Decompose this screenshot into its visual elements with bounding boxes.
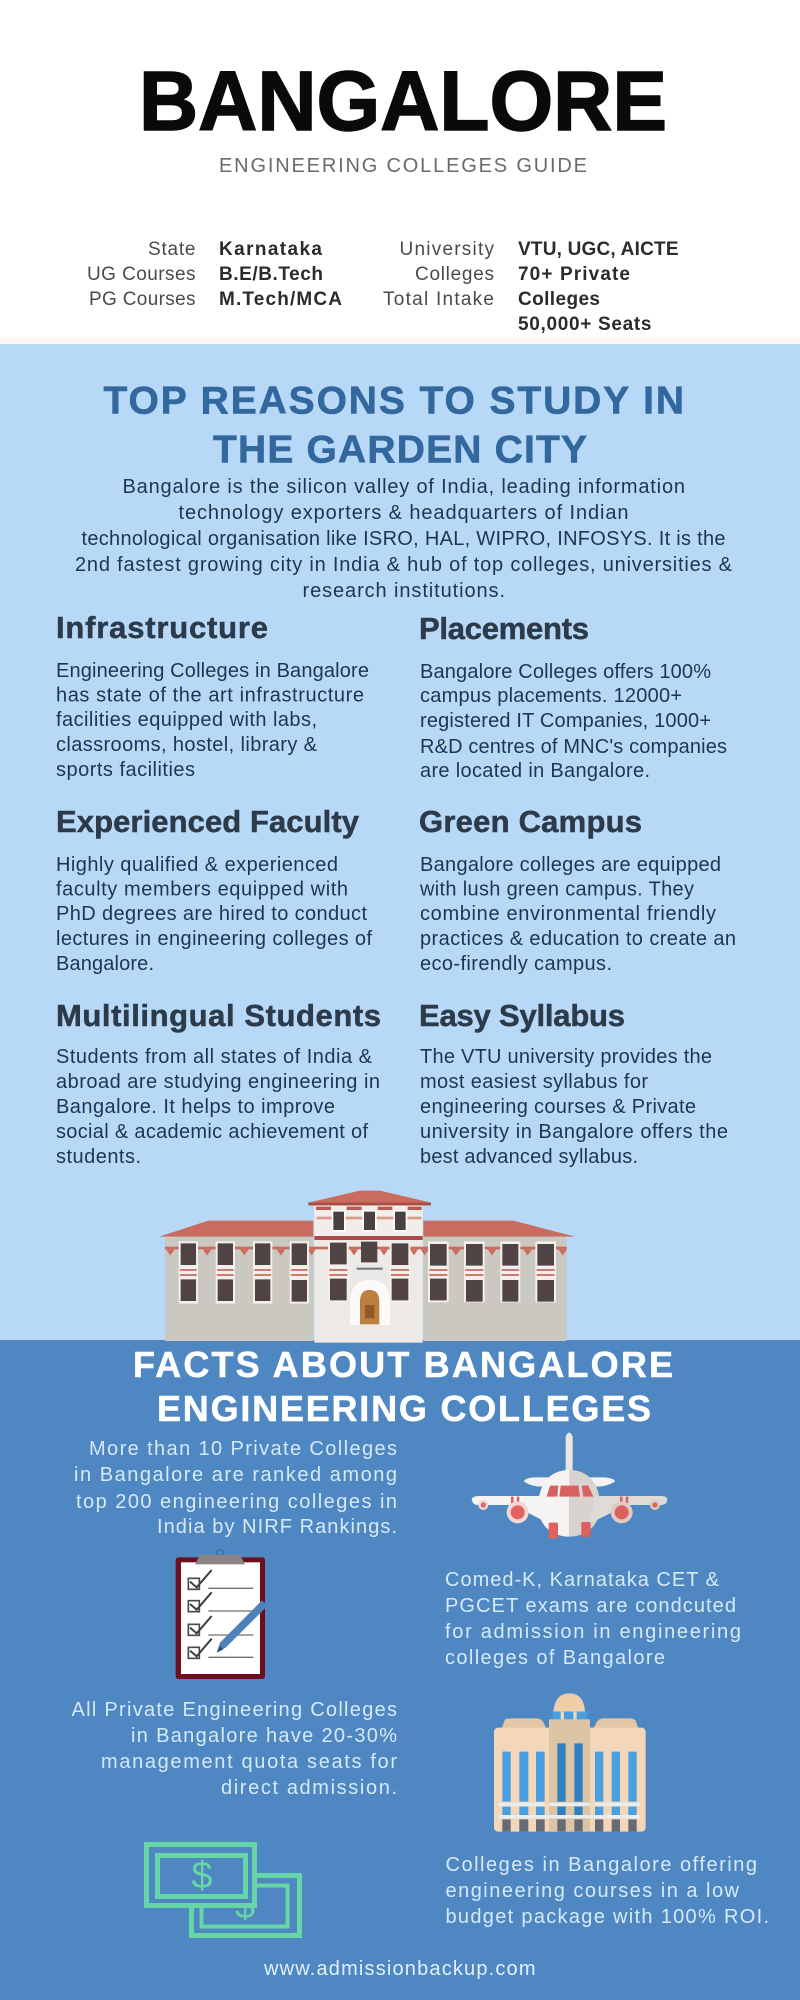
key facts table: right column: University: [400, 239, 494, 260]
intro paragraph: research institutions.: [302, 580, 505, 602]
reason: infrastructure: has state of the art infrastructure: [56, 684, 364, 706]
reason: multilingual students: social & academic achievement of: [56, 1121, 368, 1143]
icon: office building: [494, 1693, 646, 1832]
key facts table: left column: State: [148, 239, 196, 260]
key facts table: left column: PG Courses: [89, 289, 196, 310]
reason: infrastructure: Infrastructure: [56, 610, 268, 645]
fact: low budget: budget package with 100% ROI.: [446, 1906, 769, 1928]
intro paragraph: technological organisation like ISRO, HAL, WIPRO, INFOSYS. It is the: [82, 528, 726, 550]
key facts table: right column: Colleges: [518, 289, 600, 310]
key facts table: right column: 50,000+ Seats: [518, 314, 652, 335]
icon: banknotes: $: [235, 1885, 255, 1926]
icon: clipboard checklist: [176, 1550, 268, 1679]
reason: green campus: eco-firendly campus.: [420, 953, 612, 975]
footer website: www.admissionbackup.com: [263, 1958, 536, 1980]
subtitle: ENGINEERING COLLEGES GUIDE: [219, 155, 587, 177]
reason: placements: campus placements. 12000+: [420, 685, 682, 707]
fact: entrance exams: PGCET exams are condcuted: [445, 1595, 736, 1617]
reason: placements: registered IT Companies, 1000+: [420, 710, 711, 732]
heading: top reasons: [104, 380, 684, 472]
reason: multilingual students: abroad are studying engineering in: [56, 1071, 380, 1093]
fact: NIRF rankings: in Bangalore are ranked among: [74, 1464, 397, 1486]
intro paragraph: 2nd fastest growing city in India & hub of top colleges, universities &: [75, 554, 733, 576]
reason: experienced faculty: Experienced Faculty: [56, 804, 360, 839]
fact: entrance exams: [445, 1569, 741, 1669]
fact: management quota: management quota seats for: [101, 1751, 397, 1773]
reason: easy syllabus: best advanced syllabus.: [420, 1146, 638, 1168]
fact: management quota: in Bangalore have 20-30%: [131, 1725, 397, 1747]
reason: placements: Placements: [419, 611, 589, 646]
icon: banknotes: $: [191, 1855, 213, 1897]
reason: easy syllabus: [419, 998, 728, 1168]
panel: header: [0, 0, 800, 344]
fact: entrance exams: Comed-K, Karnataka CET &: [445, 1569, 720, 1591]
reason: placements: Bangalore Colleges offers 100%: [420, 661, 711, 683]
fact: NIRF rankings: [74, 1438, 397, 1538]
reason: easy syllabus: engineering courses & Private: [420, 1096, 696, 1118]
reason: placements: R&D centres of MNC's companies: [420, 736, 727, 758]
reason: multilingual students: Multilingual Students: [56, 998, 381, 1033]
reason: infrastructure: Engineering Colleges in Bangalore: [56, 660, 369, 682]
fact: management quota: [72, 1699, 397, 1799]
intro paragraph: Bangalore is the silicon valley of India, leading information: [122, 476, 685, 498]
fact: low budget: [446, 1854, 769, 1928]
reason: experienced faculty: [56, 804, 372, 975]
fact: entrance exams: colleges of Bangalore: [445, 1647, 665, 1669]
reason: green campus: Green Campus: [419, 804, 642, 839]
key facts table: left column: UG Courses: [87, 264, 196, 285]
reason: experienced faculty: Highly qualified & experienced: [56, 854, 338, 876]
title: BANGALORE: [139, 54, 667, 148]
reason: green campus: practices & education to create an: [420, 928, 736, 950]
reason: multilingual students: Students from all states of India &: [56, 1046, 373, 1068]
reason: infrastructure: sports facilities: [56, 759, 195, 781]
reason: experienced faculty: faculty members equipped with: [56, 878, 348, 900]
intro paragraph: technology exporters & headquarters of Indian: [178, 502, 628, 524]
reason: infrastructure: classrooms, hostel, library &: [56, 734, 318, 756]
reason: multilingual students: Bangalore. It helps to improve: [56, 1096, 335, 1118]
key facts table: left column: M.Tech/MCA: [219, 289, 342, 310]
key facts table: right column: Total Intake: [383, 289, 494, 310]
reason: experienced faculty: lectures in engineering colleges of: [56, 928, 372, 950]
reason: green campus: Bangalore colleges are equipped: [420, 854, 721, 876]
reason: green campus: with lush green campus. They: [419, 878, 694, 900]
reason: experienced faculty: PhD degrees are hired to conduct: [56, 903, 367, 925]
reason: infrastructure: [56, 610, 369, 781]
key facts table: right column: Colleges: [415, 264, 494, 285]
key facts table: left column: B.E/B.Tech: [219, 264, 323, 285]
key facts table: left column: [87, 239, 342, 310]
fact: management quota: direct admission.: [221, 1777, 397, 1799]
fact: NIRF rankings: India by NIRF Rankings.: [157, 1516, 397, 1538]
key facts table: left column: Karnataka: [219, 239, 322, 260]
fact: NIRF rankings: More than 10 Private Colleges: [89, 1438, 397, 1460]
reason: multilingual students: [56, 998, 381, 1168]
heading: top reasons: THE GARDEN CITY: [213, 428, 587, 472]
reason: easy syllabus: Easy Syllabus: [419, 998, 625, 1033]
icon: banknotes: [146, 1844, 300, 1936]
reason: easy syllabus: university in Bangalore offers the: [420, 1121, 728, 1143]
heading: top reasons: TOP REASONS TO STUDY IN: [104, 380, 684, 422]
reason: multilingual students: students.: [56, 1146, 141, 1168]
heading: facts: [133, 1344, 673, 1429]
heading: facts: FACTS ABOUT BANGALORE: [133, 1344, 673, 1385]
icon: airplane: [472, 1432, 667, 1538]
fact: NIRF rankings: top 200 engineering colleges in: [76, 1491, 397, 1513]
fact: management quota: All Private Engineering Colleges: [72, 1699, 397, 1721]
key facts table: right column: VTU, UGC, AICTE: [518, 239, 678, 260]
reason: infrastructure: facilities equipped with labs,: [56, 709, 317, 731]
reason: placements: are located in Bangalore.: [420, 760, 650, 782]
intro paragraph: [75, 476, 733, 602]
fact: low budget: Colleges in Bangalore offering: [446, 1854, 757, 1876]
heading: facts: ENGINEERING COLLEGES: [157, 1388, 651, 1429]
reason: green campus: combine environmental friendly: [420, 903, 716, 925]
reason: experienced faculty: Bangalore.: [56, 953, 154, 975]
fact: entrance exams: for admission in engineering: [445, 1621, 741, 1643]
key facts table: right column: [383, 239, 678, 335]
reason: green campus: [419, 804, 736, 975]
key facts table: right column: 70+ Private: [518, 264, 630, 285]
icon: college building: [159, 1191, 575, 1343]
panel: facts: [0, 1191, 800, 2000]
panel: top reasons: [0, 344, 800, 1340]
reason: placements: [419, 611, 727, 782]
fact: low budget: engineering courses in a low: [446, 1880, 740, 1902]
reason: easy syllabus: The VTU university provides the: [420, 1046, 712, 1068]
reason: easy syllabus: most easiest syllabus for: [420, 1071, 648, 1093]
